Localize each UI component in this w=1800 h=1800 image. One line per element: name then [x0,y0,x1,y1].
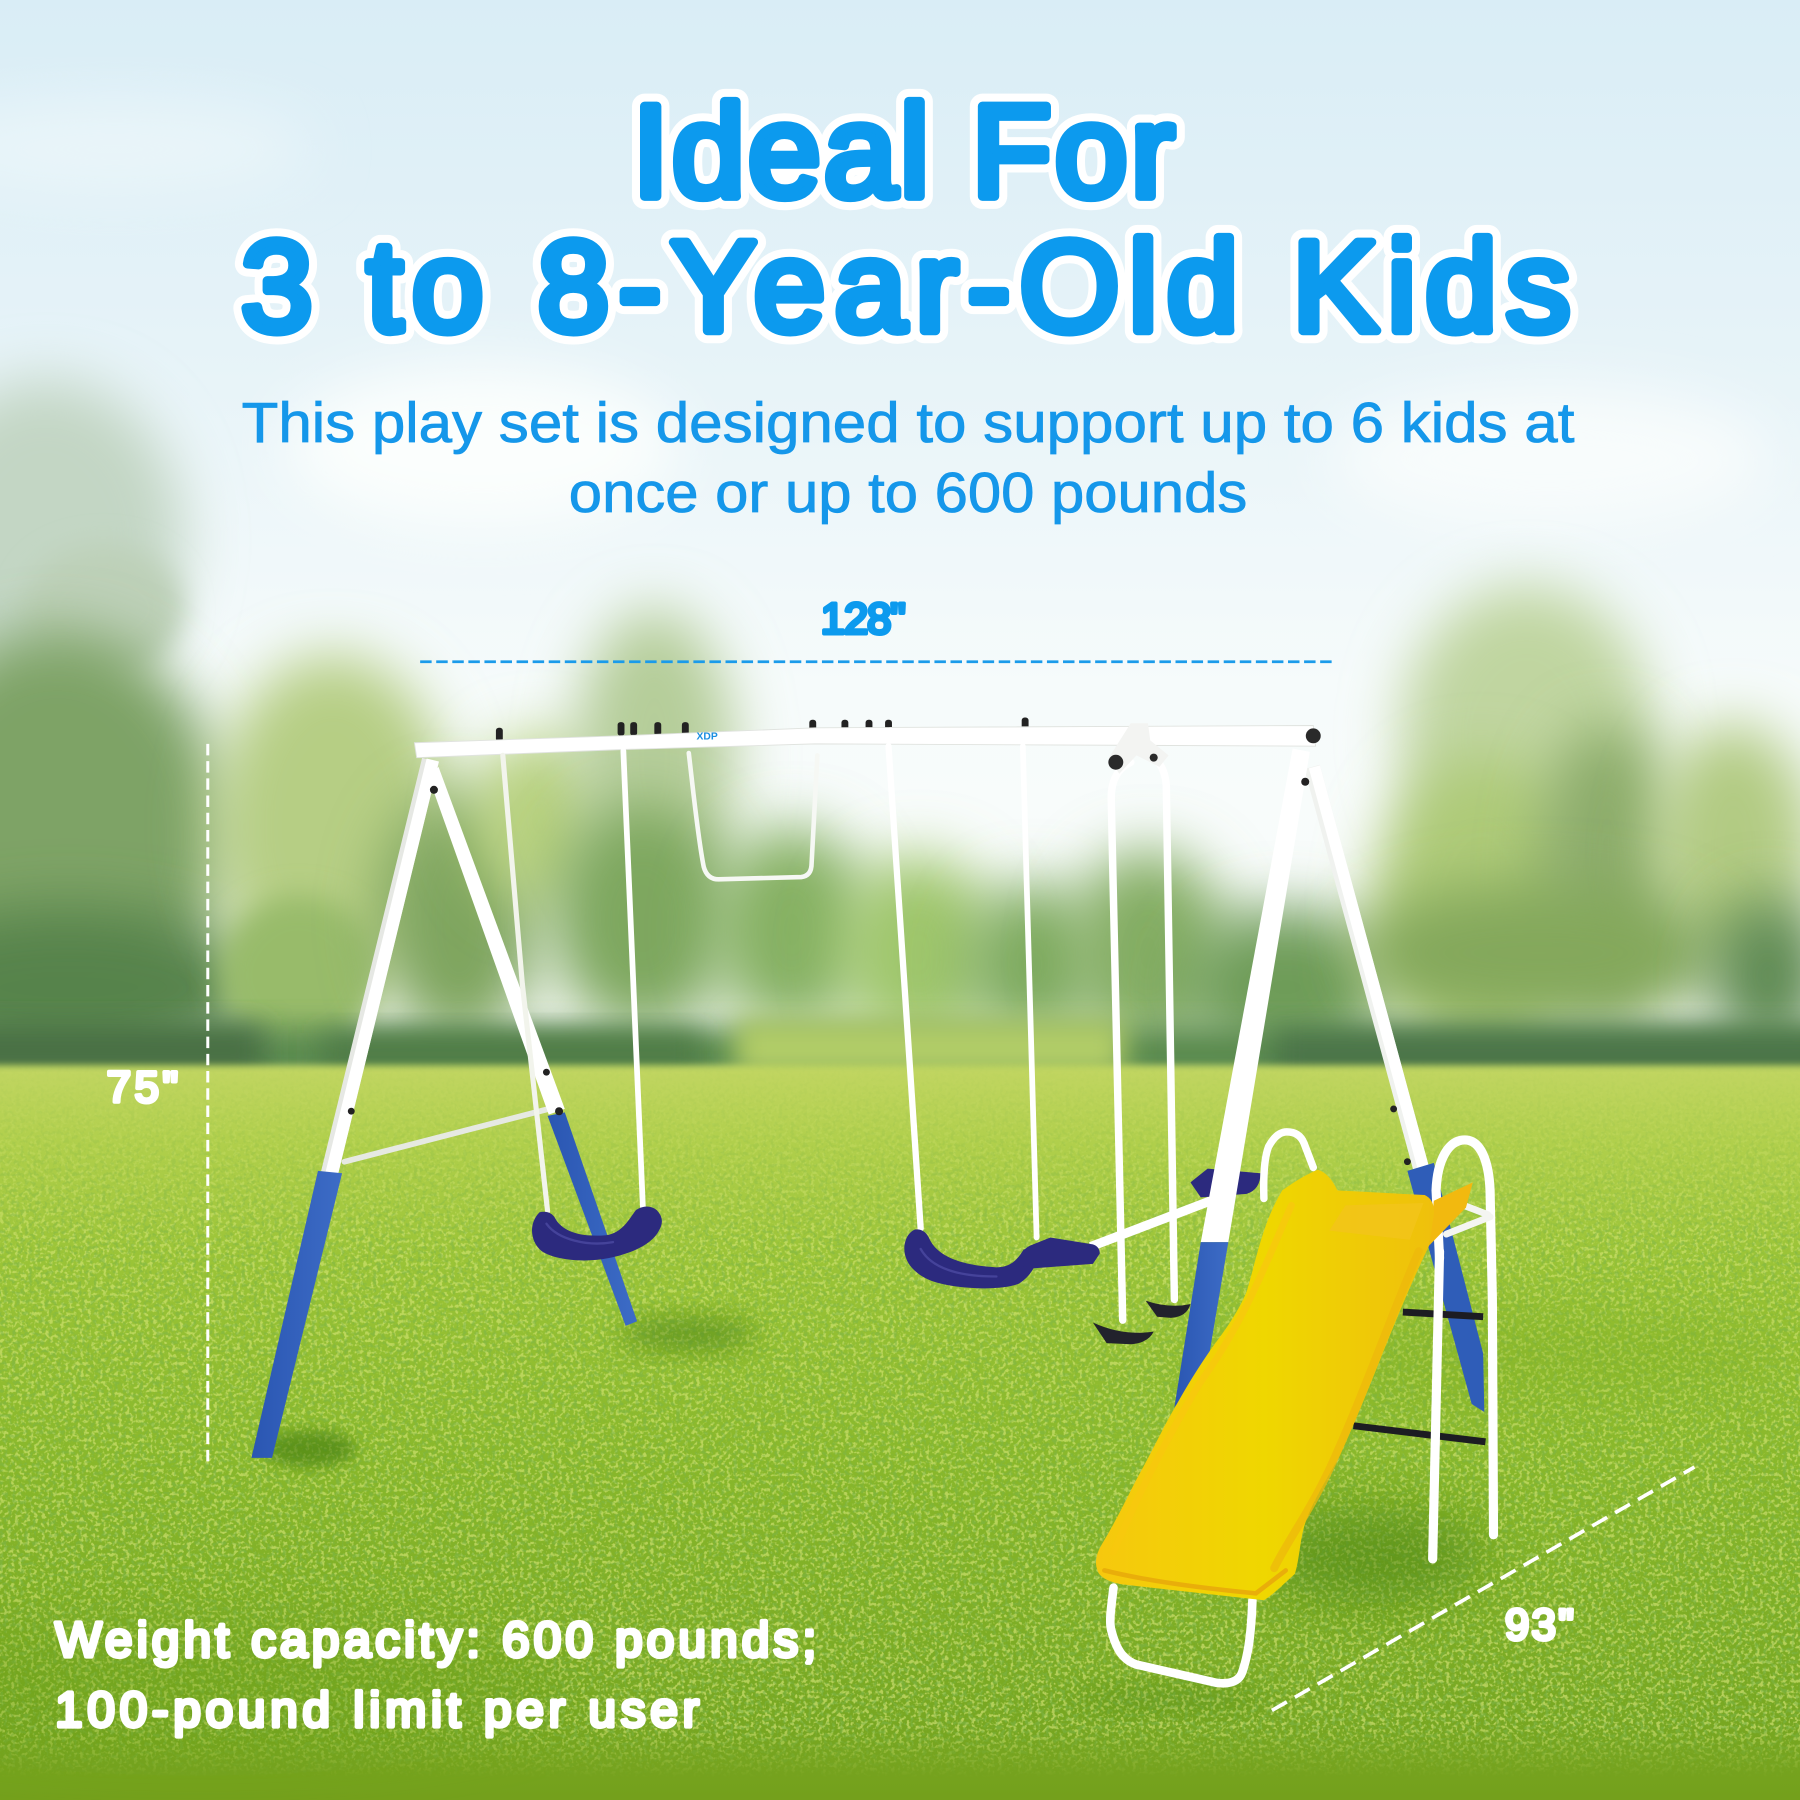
swing set [251,717,1493,1683]
ground shadows [264,1318,1487,1710]
trapeze rings poles [1093,723,1190,1344]
back leg right side [1312,767,1484,1412]
height dimension: 75 inches: 75" [107,1064,178,1112]
weight capacity note: 100-pound limit per user [55,1683,699,1738]
depth dimension: 93 inches: 93" [1505,1601,1574,1649]
slide foot loop [1110,1588,1252,1683]
depth dimension: 93 inches [1272,1467,1694,1710]
title: 3 to 8-Year-Old Kids [241,216,1570,359]
top beam: XDP [697,731,718,742]
title: Ideal For [633,78,1174,224]
slide ladder [1264,1132,1493,1559]
background: sky [0,0,1800,1148]
title: 3 to 8-Year-Old Kids [241,216,1570,359]
glider [1020,1169,1260,1268]
yellow slide [1096,1170,1473,1600]
left A-frame [251,760,637,1458]
swing 2 [889,746,1038,1288]
subtitle [242,391,1575,524]
weight capacity note [55,1613,816,1738]
top beam [414,717,1321,758]
background: blurred tree line [0,379,1800,1085]
width dimension: 128 inches: 128" [821,596,906,644]
background: grass lawn [0,1062,1800,1800]
weight capacity note: Weight capacity: 600 pounds; [55,1613,816,1668]
right A-frame front leg [1174,748,1310,1407]
trapeze bar [689,753,817,879]
subtitle: once or up to 600 pounds [569,461,1247,524]
subtitle: This play set is designed to support up to 6 kids at [242,391,1575,454]
swing 1 [503,751,662,1260]
title [241,78,1570,359]
title: Ideal For [633,78,1174,224]
